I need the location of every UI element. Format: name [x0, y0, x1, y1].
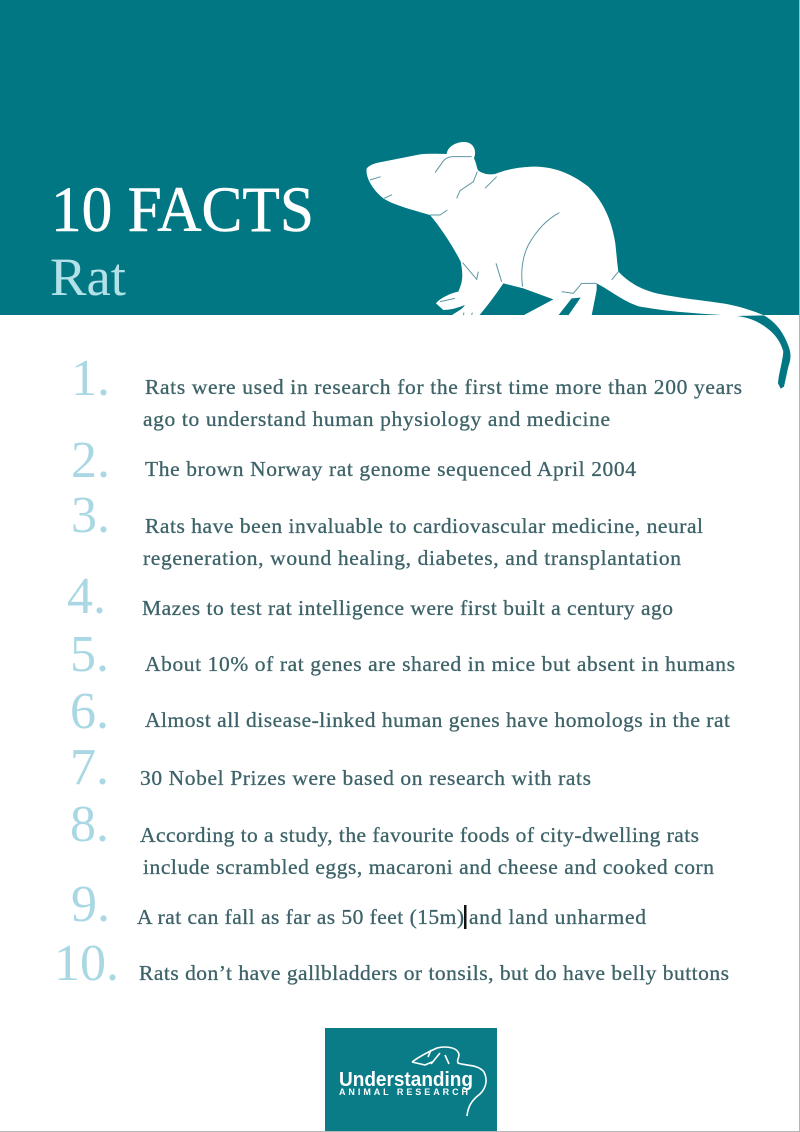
- fact 7: 7.: [70, 739, 109, 796]
- fact 5: [70, 626, 735, 683]
- fact 4: [67, 568, 673, 625]
- fact 2: [71, 432, 636, 489]
- fact 10: [54, 935, 729, 992]
- icon: rat illustration: [367, 142, 790, 389]
- fact 3: regeneration, wound healing, diabetes, and transplantation: [143, 546, 681, 570]
- fact 4: 4.: [67, 568, 106, 625]
- fact 3: 3.: [71, 487, 110, 544]
- fact 5: About 10% of rat genes are shared in mice but absent in humans: [145, 652, 735, 676]
- fact 9: A rat can fall as far as 50 feet (15m): [137, 905, 464, 929]
- fact 6: [70, 683, 730, 740]
- header banner: [0, 0, 799, 315]
- fact 5: 5.: [70, 626, 109, 683]
- logo: Understanding Animal Research: [325, 1028, 497, 1131]
- fact 3: [71, 487, 703, 570]
- fact 1: [71, 350, 742, 431]
- fact 8: [70, 796, 714, 879]
- fact 2: 2.: [71, 432, 110, 489]
- subtitle: Rat: [50, 247, 126, 307]
- fact 2: The brown Norway rat genome sequenced April 2004: [145, 457, 636, 481]
- fact 9: 9.: [71, 876, 110, 933]
- fact 6: 6.: [70, 683, 109, 740]
- fact 3: Rats have been invaluable to cardiovascular medicine, neural: [145, 514, 703, 538]
- fact 10: Rats don’t have gallbladders or tonsils, but do have belly buttons: [139, 961, 729, 985]
- fact 9: and land unharmed: [469, 905, 646, 929]
- logo: Understanding Animal Research: Understanding: [339, 1069, 473, 1091]
- fact 1: Rats were used in research for the first time more than 200 years: [145, 375, 742, 399]
- icon: logo rat outline: [412, 1047, 486, 1116]
- fact 6: Almost all disease-linked human genes have homologs in the rat: [145, 708, 730, 732]
- fact 8: include scrambled eggs, macaroni and cheese and cooked corn: [143, 855, 714, 879]
- fact 4: Mazes to test rat intelligence were first built a century ago: [142, 596, 673, 620]
- fact 10: 10.: [54, 935, 119, 992]
- fact 1: ago to understand human physiology and medicine: [143, 407, 610, 431]
- fact 7: [70, 739, 591, 796]
- fact 1: 1.: [71, 350, 110, 407]
- fact 8: 8.: [70, 796, 109, 853]
- fact 8: According to a study, the favourite foods of city-dwelling rats: [140, 823, 699, 847]
- title: 10 FACTS: [51, 174, 314, 246]
- fact 9: [71, 876, 646, 933]
- logo: Understanding Animal Research: ANIMAL RESEARCH: [339, 1087, 468, 1097]
- fact 7: 30 Nobel Prizes were based on research with rats: [140, 766, 591, 790]
